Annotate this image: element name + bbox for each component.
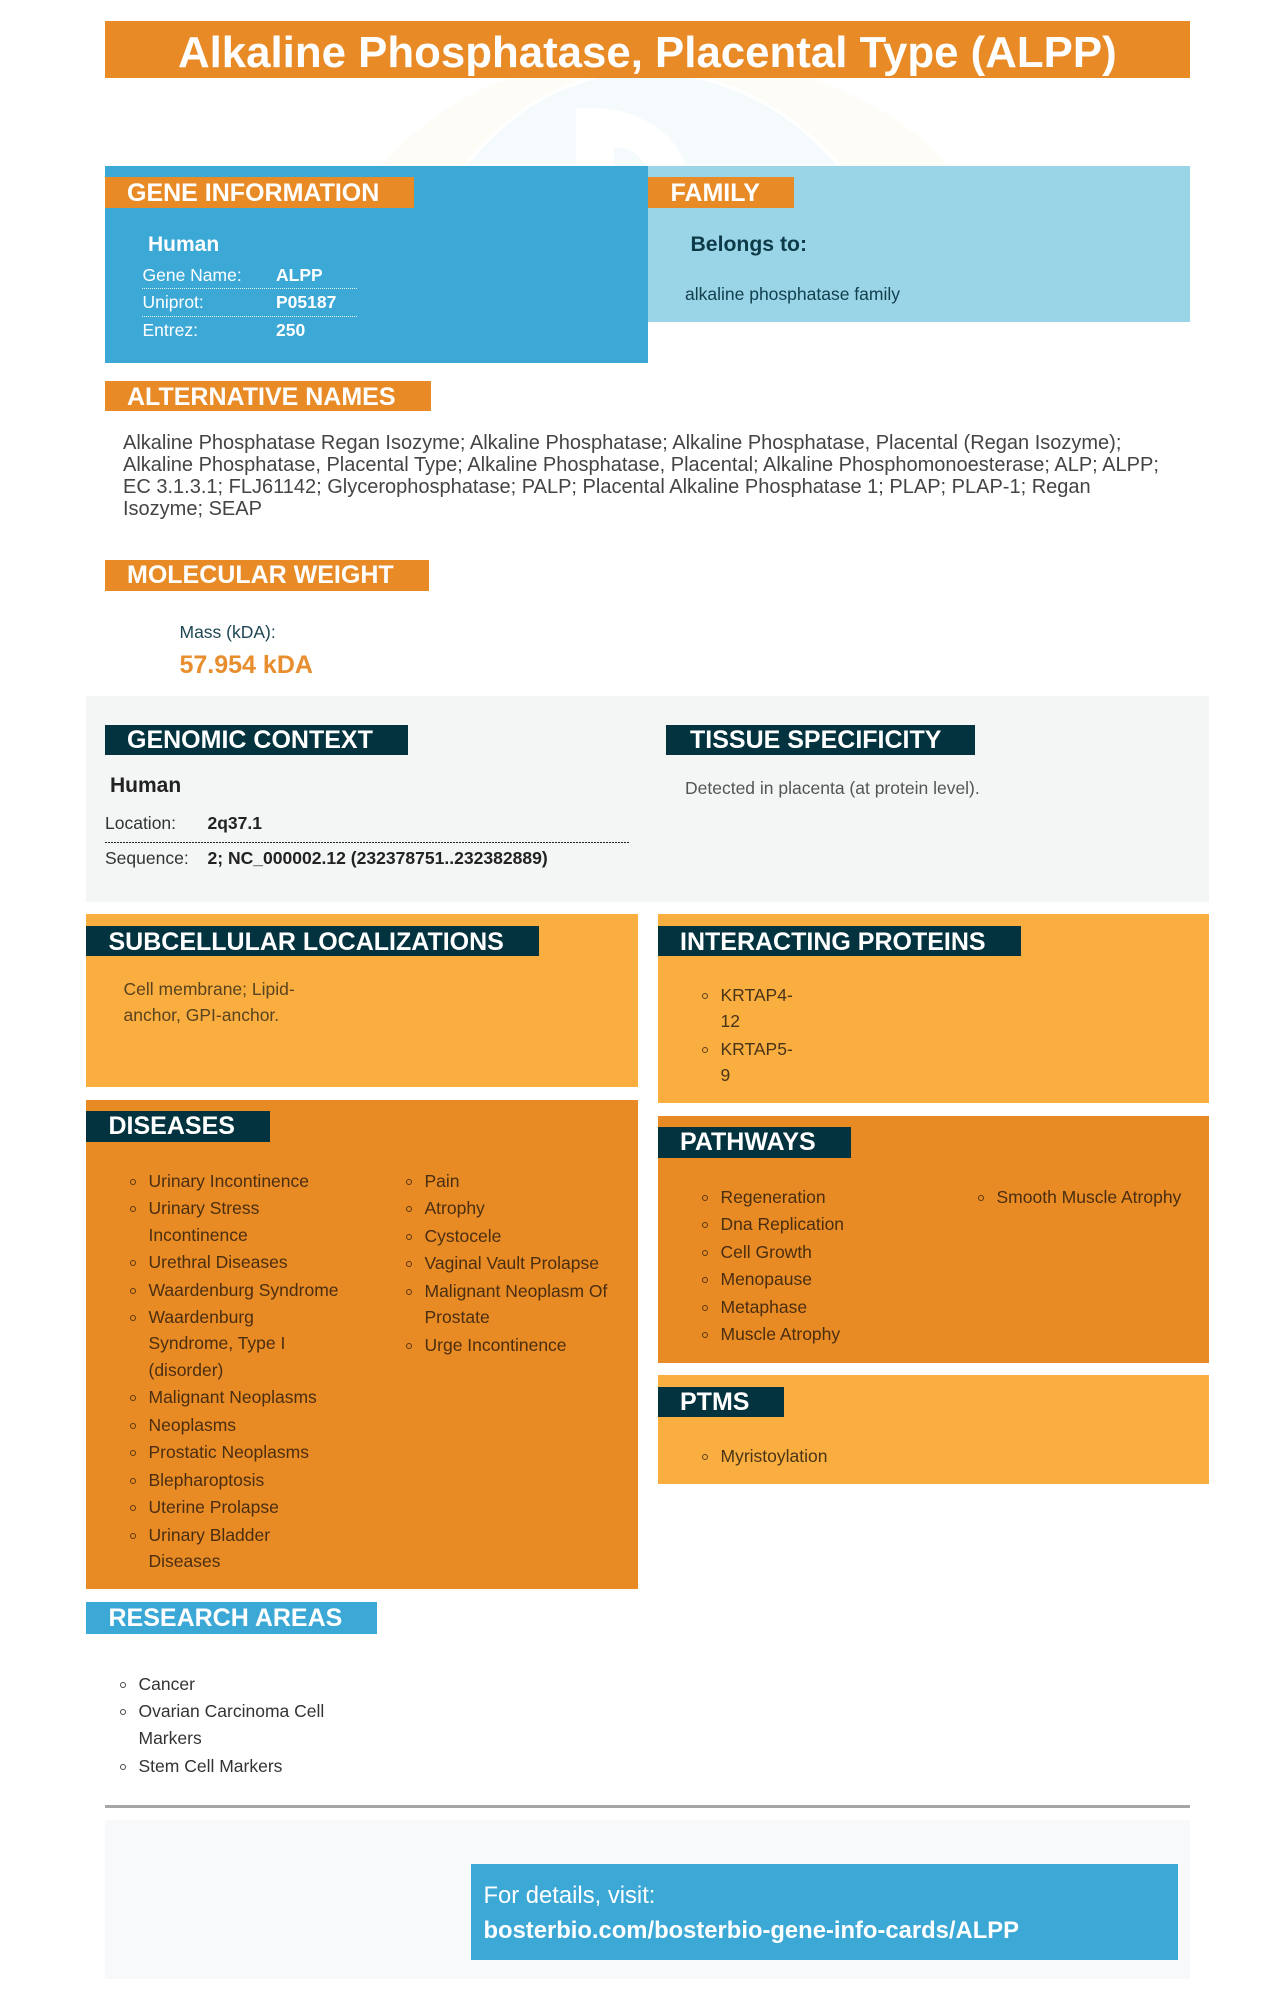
panel: genomic context and tissue specificity: Human xyxy=(110,774,181,797)
panel: diseases: (disorder) xyxy=(148,1360,223,1380)
panel: family: Belongs to: xyxy=(690,233,807,256)
panel: interacting proteins xyxy=(658,914,1209,1103)
panel: diseases: Urethral Diseases xyxy=(148,1252,288,1272)
panel: genomic context and tissue specificity xyxy=(86,696,1209,902)
panel: pathways: PATHWAYS xyxy=(680,1128,816,1156)
panel: gene information: GENE INFORMATION xyxy=(127,179,379,207)
panel: pathways: Cell Growth xyxy=(720,1242,812,1262)
panel: gene information: Gene Name: xyxy=(142,264,242,284)
panel: gene information: Entrez: xyxy=(142,320,198,340)
callout: details link: bosterbio.com/bosterbio-gene-info-cards/ALPP xyxy=(484,1916,1019,1944)
heading: genomic context: GENOMIC CONTEXT xyxy=(127,726,373,754)
panel: genomic context and tissue specificity: Sequence: xyxy=(105,848,189,868)
text block: alternative names: EC 3.1.3.1; FLJ61142; Glycerophosphatase; PALP; Placental Alkaline Phosphatase 1; PLAP; PLAP-1; Regan xyxy=(123,476,1091,498)
panel: diseases: Vaginal Vault Prolapse xyxy=(424,1252,599,1272)
panel: pathways: Dna Replication xyxy=(720,1214,844,1234)
panel: interacting proteins: KRTAP4- xyxy=(720,984,793,1004)
panel: PTMs: Myristoylation xyxy=(720,1446,827,1466)
molecular weight value: 57.954 kDA xyxy=(180,650,313,678)
panel: subcellular localizations: SUBCELLULAR LOCALIZATIONS xyxy=(108,928,504,956)
panel: diseases: Waardenburg xyxy=(148,1307,254,1327)
panel: gene information: Human xyxy=(148,233,219,256)
panel: diseases: Malignant Neoplasm Of xyxy=(424,1280,607,1300)
heading: molecular weight: MOLECULAR WEIGHT xyxy=(127,561,394,589)
panel: gene information: 250 xyxy=(276,320,305,340)
panel: gene information: Uniprot: xyxy=(142,292,204,312)
panel: diseases: Urinary Bladder xyxy=(148,1524,270,1544)
panel: interacting proteins: INTERACTING PROTEINS xyxy=(680,928,986,956)
text block: alternative names xyxy=(123,432,1159,520)
panel: subcellular localizations xyxy=(86,914,638,1087)
list: research areas: Ovarian Carcinoma Cell xyxy=(138,1701,324,1721)
molecular weight value xyxy=(180,622,313,678)
heading: research areas: RESEARCH AREAS xyxy=(108,1604,342,1632)
watermark logo xyxy=(468,78,836,166)
panel: diseases: Urinary Incontinence xyxy=(148,1170,309,1190)
panel: family xyxy=(648,166,1190,322)
panel: pathways: Smooth Muscle Atrophy xyxy=(996,1186,1181,1206)
text block: alternative names: Alkaline Phosphatase, Placental Type; Alkaline Phosphatase, Placental; Alkaline Phosphomonoesterase; ALP; ALPP; xyxy=(123,454,1159,476)
panel: diseases: Malignant Neoplasms xyxy=(148,1387,317,1407)
panel: genomic context and tissue specificity: Detected in placenta (at protein level). xyxy=(685,778,980,798)
panel: pathways xyxy=(658,1116,1209,1363)
list: research areas: Cancer xyxy=(138,1674,195,1694)
text block: alternative names: Alkaline Phosphatase Regan Isozyme; Alkaline Phosphatase; Alkaline Phosphatase, Placental (Regan Isozyme); xyxy=(123,432,1121,454)
panel: diseases: Prostate xyxy=(424,1306,490,1326)
panel: footer xyxy=(105,1820,1190,1979)
panel: gene information: ALPP xyxy=(276,264,323,284)
text block: alternative names: Isozyme; SEAP xyxy=(123,498,262,520)
panel: diseases: Waardenburg Syndrome xyxy=(148,1280,339,1300)
heading: alternative names: ALTERNATIVE NAMES xyxy=(127,383,396,411)
panel: PTMs xyxy=(658,1375,1209,1484)
callout: details link xyxy=(471,1864,1178,1960)
panel: diseases: Neoplasms xyxy=(148,1414,236,1434)
panel: subcellular localizations: anchor, GPI-anchor. xyxy=(124,1004,279,1024)
panel: interacting proteins: KRTAP5- xyxy=(720,1038,793,1058)
panel: diseases: Cystocele xyxy=(424,1226,501,1246)
panel: diseases: Prostatic Neoplasms xyxy=(148,1442,309,1462)
panel: diseases: Diseases xyxy=(148,1550,220,1570)
panel: interacting proteins: 12 xyxy=(720,1010,740,1030)
panel: diseases: Syndrome, Type I xyxy=(148,1332,285,1352)
panel: diseases: Blepharoptosis xyxy=(148,1470,264,1490)
panel: diseases: Atrophy xyxy=(424,1198,485,1218)
panel: pathways: Muscle Atrophy xyxy=(720,1324,840,1344)
heading: tissue specificity: TISSUE SPECIFICITY xyxy=(690,726,941,754)
panel: diseases: Urinary Stress xyxy=(148,1198,259,1218)
panel: interacting proteins: 9 xyxy=(720,1064,730,1084)
panel: pathways: Metaphase xyxy=(720,1296,807,1316)
panel: diseases: DISEASES xyxy=(108,1112,235,1140)
panel: genomic context and tissue specificity: 2q37.1 xyxy=(208,812,262,832)
list: research areas: Stem Cell Markers xyxy=(138,1756,282,1776)
panel: genomic context and tissue specificity: 2; NC_000002.12 (232378751..232382889) xyxy=(208,848,548,868)
molecular weight value: Mass (kDA): xyxy=(180,622,276,642)
title: Alkaline Phosphatase, Placental Type (ALPP) xyxy=(178,28,1117,76)
panel: PTMs: PTMS xyxy=(680,1388,749,1416)
panel: gene information xyxy=(105,166,648,363)
panel: diseases: Incontinence xyxy=(148,1224,248,1244)
panel: genomic context and tissue specificity: Location: xyxy=(105,812,176,832)
panel: pathways: Menopause xyxy=(720,1268,812,1288)
list: research areas xyxy=(120,1674,324,1776)
panel: subcellular localizations: Cell membrane; Lipid- xyxy=(124,979,295,999)
panel: diseases: Uterine Prolapse xyxy=(148,1497,279,1517)
panel: diseases: Urge Incontinence xyxy=(424,1334,567,1354)
callout: details link: For details, visit: xyxy=(484,1882,655,1908)
panel: family: alkaline phosphatase family xyxy=(685,284,900,304)
panel: gene information: P05187 xyxy=(276,292,336,312)
panel: diseases: Pain xyxy=(424,1170,460,1190)
panel: pathways: Regeneration xyxy=(720,1186,826,1206)
panel: family: FAMILY xyxy=(670,179,760,207)
panel: diseases xyxy=(86,1100,638,1589)
list: research areas: Markers xyxy=(138,1728,202,1748)
